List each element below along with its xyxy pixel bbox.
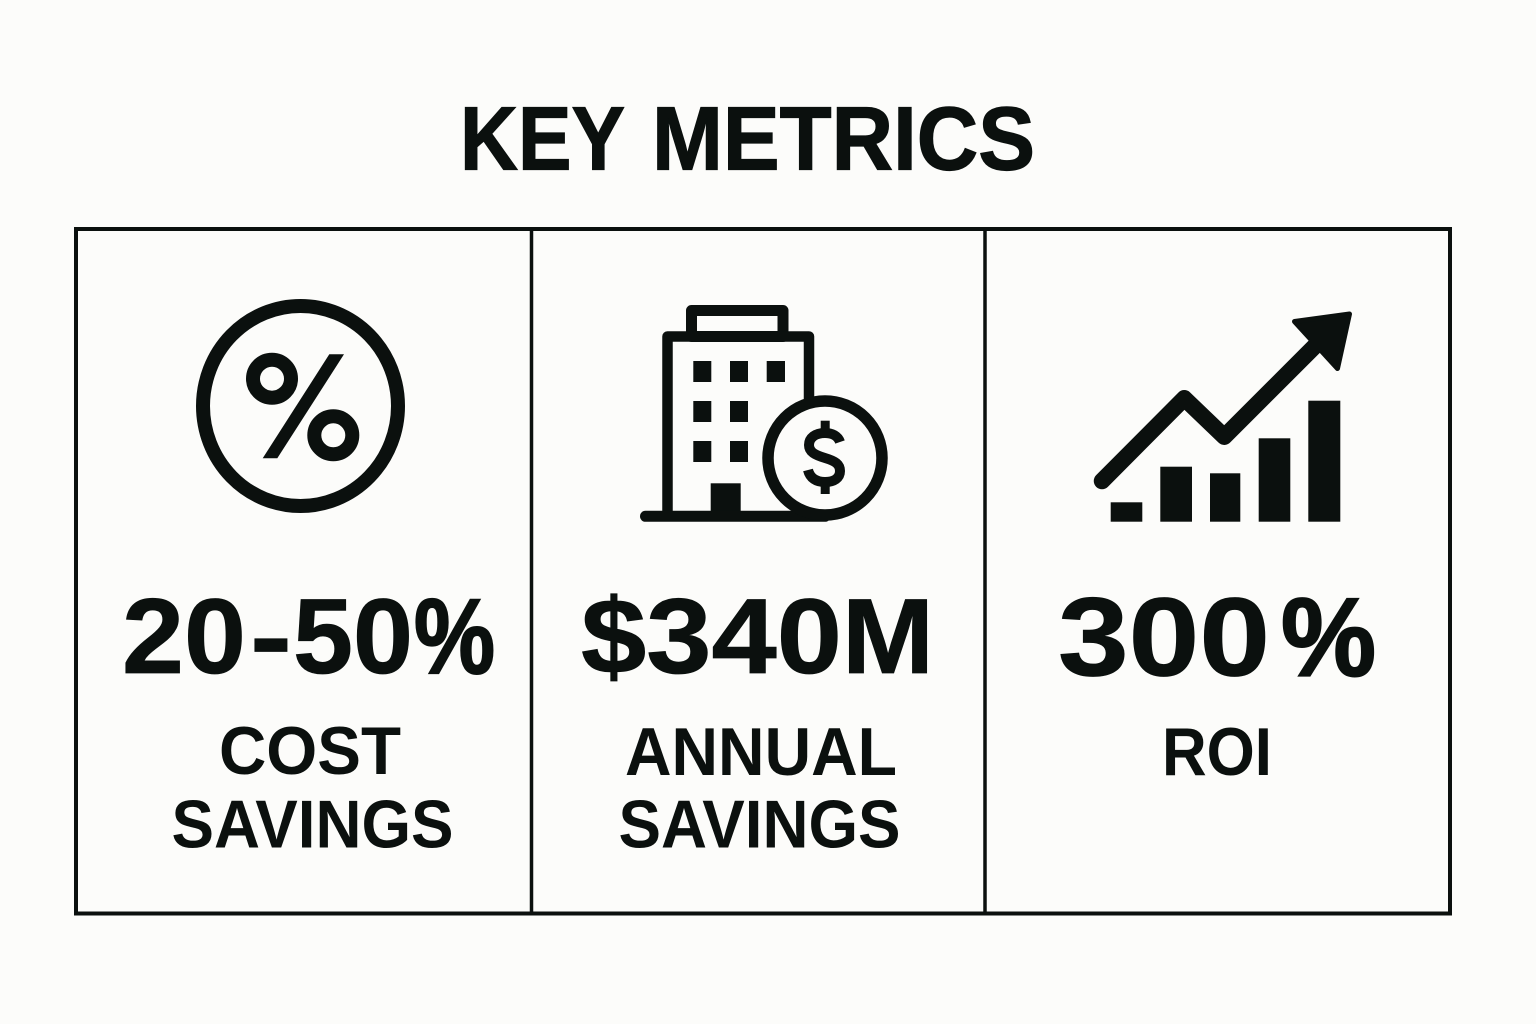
label: cost savings: COST	[219, 713, 401, 789]
label: cost savings	[172, 713, 454, 862]
panel: ROI	[1058, 314, 1376, 790]
icon: office building with dollar coin	[646, 310, 882, 516]
icon: rising bar chart with arrow	[1102, 314, 1350, 522]
label: ROI: ROI	[1162, 714, 1272, 790]
metric: $340M: $340	[581, 576, 842, 696]
metric: 20-50%: 50	[293, 576, 413, 696]
frame: three-column table	[76, 229, 1450, 914]
metric: 20-50%: %	[414, 576, 495, 696]
metric: $340M: M	[842, 576, 934, 696]
icon: percent in circle	[203, 306, 398, 506]
metric: 20-50%: 20	[122, 576, 246, 696]
metric: 300%: %	[1281, 576, 1376, 700]
label: cost savings: SAVINGS	[172, 786, 454, 862]
panel: cost savings	[122, 306, 495, 862]
label: annual savings: ANNUAL	[625, 714, 897, 790]
label: annual savings: SAVINGS	[618, 786, 900, 862]
title: KEY	[460, 90, 625, 190]
metric: 20-50%: -	[250, 576, 292, 696]
metric: 300%: 300	[1058, 576, 1270, 700]
title: METRICS	[652, 90, 1035, 190]
panel: annual savings	[581, 310, 934, 862]
label: annual savings	[618, 714, 900, 862]
